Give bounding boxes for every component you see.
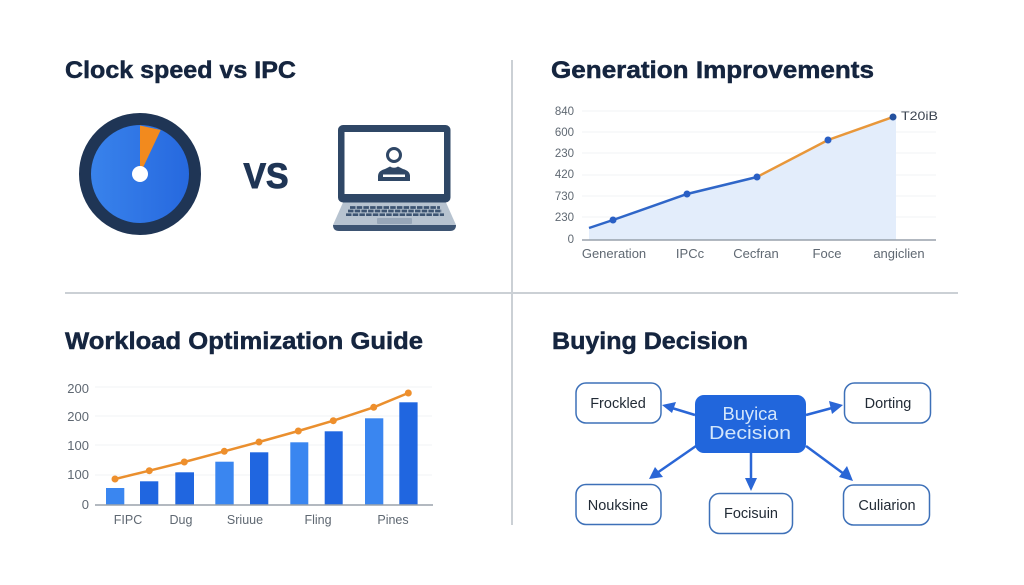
node: Dorting: Dorting — [865, 396, 911, 412]
bar and line chart: 0 — [82, 497, 89, 512]
bar and line chart: 100 — [67, 438, 89, 453]
heading: workload optimization guide: Workload Optimization Guide — [65, 328, 423, 355]
bar and line chart: Dug — [170, 513, 193, 527]
line chart: T20iB — [901, 109, 938, 123]
line chart: Foce — [813, 246, 841, 261]
node: Culiarion: Culiarion — [858, 498, 916, 514]
panel: buying decision — [552, 328, 930, 534]
line chart: Cecfran — [733, 246, 779, 261]
bar and line chart: 200 — [67, 409, 89, 424]
line chart — [555, 106, 938, 261]
arrows — [649, 401, 853, 491]
node: Culiarion — [844, 485, 930, 525]
node: Focisuin — [710, 494, 792, 534]
node: centre: Decision — [709, 423, 791, 443]
line chart: 420 — [555, 169, 574, 181]
icon: laptop — [333, 125, 456, 231]
bar and line chart: Fling — [304, 513, 332, 527]
bar and line chart — [67, 381, 433, 527]
heading: clock speed vs IPC: Clock speed vs IPC — [65, 57, 296, 84]
node: Dorting — [844, 383, 930, 423]
node: centre — [695, 395, 806, 453]
line chart: 600 — [555, 127, 574, 139]
node: centre: Buyica — [722, 404, 779, 424]
line chart: IPCc — [676, 246, 705, 261]
line chart: 230 — [555, 212, 574, 224]
icon: clock speed dial — [85, 119, 195, 229]
heading: generation improvements: Generation Improvements — [551, 57, 874, 84]
node: Nouksine: Nouksine — [588, 498, 648, 514]
node: Frockled — [576, 383, 661, 423]
bar and line chart: 100 — [67, 467, 89, 482]
line chart: Generation — [582, 246, 646, 261]
bar and line chart: 200 — [67, 381, 89, 396]
line chart: 730 — [555, 191, 574, 203]
panel: clock speed vs IPC — [65, 57, 456, 231]
node: Nouksine — [576, 484, 661, 524]
bar and line chart: Sriuue — [227, 513, 263, 527]
heading: buying decision: Buying Decision — [552, 328, 748, 355]
node: Focisuin: Focisuin — [724, 506, 778, 522]
bar and line chart: Pines — [377, 513, 409, 527]
line chart: 230 — [555, 148, 574, 160]
line chart: 0 — [568, 234, 574, 246]
line chart: 840 — [555, 106, 574, 118]
panel: generation improvements — [551, 57, 938, 261]
panel: workload optimization guide — [65, 328, 433, 527]
vs label: VS — [244, 157, 288, 196]
node: Frockled: Frockled — [590, 396, 646, 412]
line chart: angiclien — [873, 246, 925, 261]
decision diagram — [576, 383, 930, 534]
bar and line chart: FIPC — [114, 513, 142, 527]
